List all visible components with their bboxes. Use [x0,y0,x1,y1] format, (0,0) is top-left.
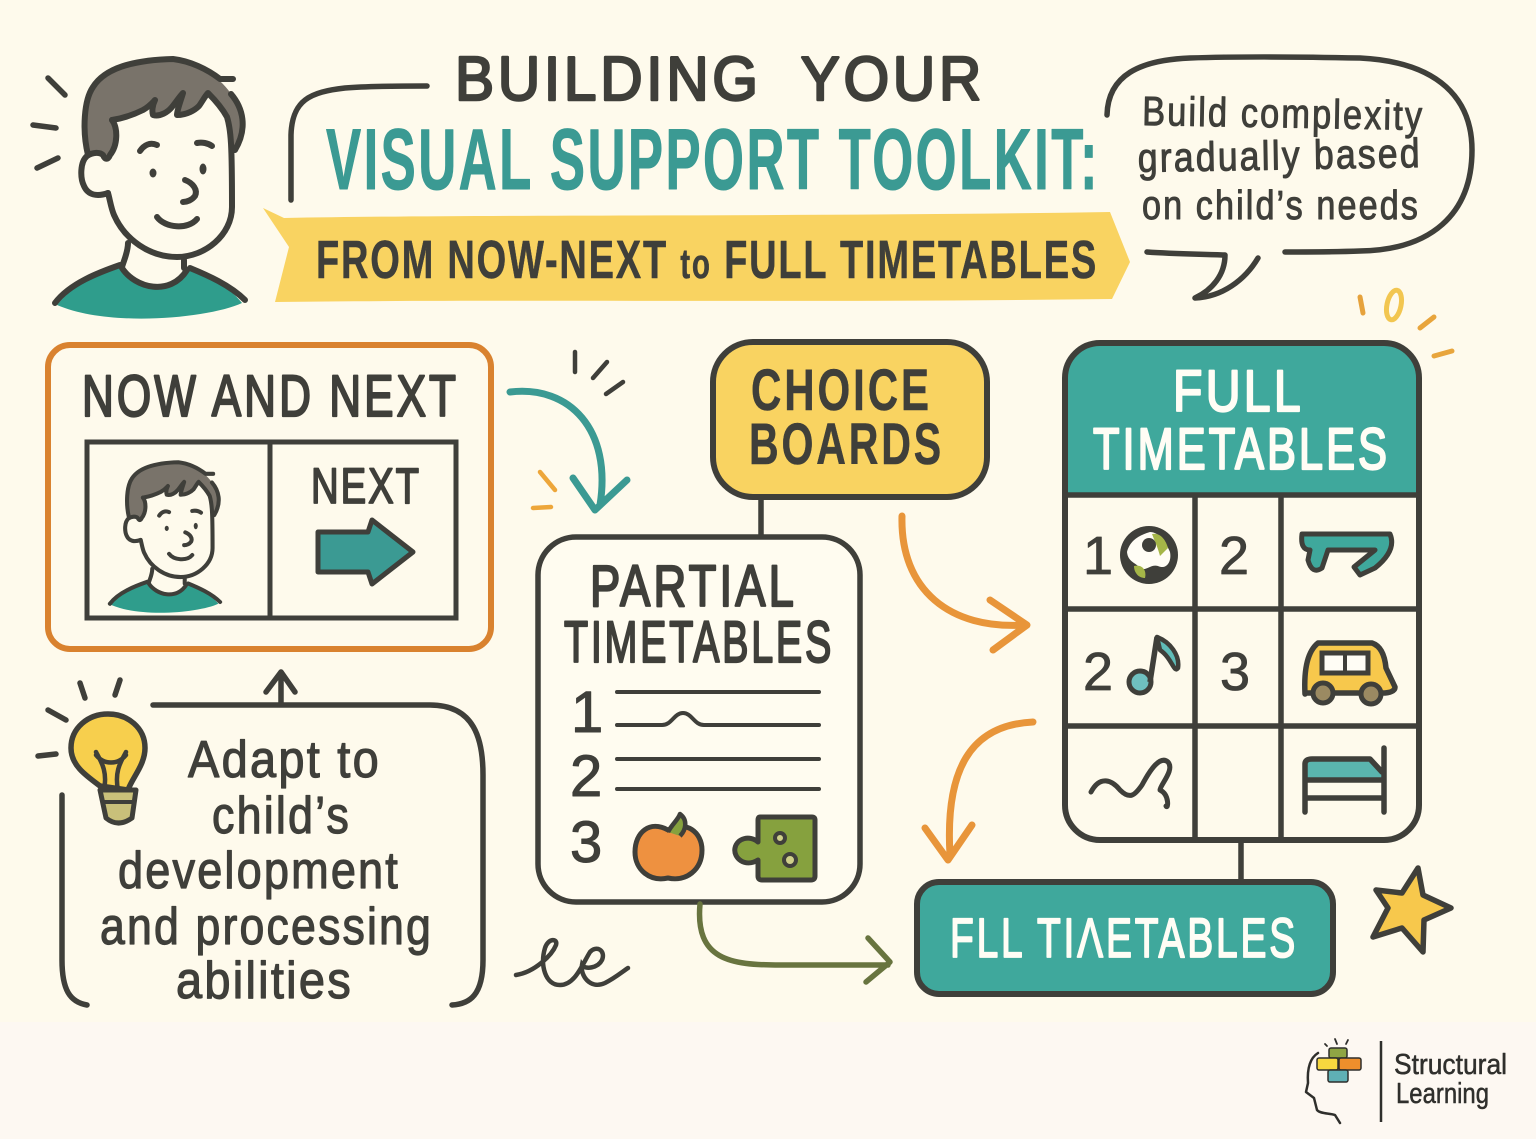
panel: full timetables: 1 [1083,526,1113,586]
icon: teal tool [1302,534,1392,575]
panel: fll timetables [917,882,1333,994]
callout: adapt to child's development: abilities [176,952,353,1010]
panel: choice boards: BOARDS [749,412,944,477]
icon: squiggle [1091,760,1170,807]
decorative sparks: full timetable [1360,289,1452,356]
panel: partial timetables: 1 [571,680,603,745]
banner: from now-next to full timetables [263,208,1130,302]
callout: adapt to child's development: child’s [212,787,351,845]
arrow: partial timetables to summary [700,904,890,982]
logo: structural learning [1306,1039,1507,1123]
now and next cards [87,442,456,618]
callout: adapt to child's development: and processing [100,898,433,956]
label: next: NEXT [311,458,421,514]
icon: apple [635,814,702,879]
logo: structural learning: Learning [1396,1078,1489,1110]
panel: partial timetables: 3 [570,810,602,875]
icon: music note [1129,637,1178,693]
speech bubble [1107,57,1472,298]
arrow: choice boards to full timetables [902,516,1027,650]
icon: star [1373,868,1451,952]
panel: now and next [48,345,491,649]
callout: adapt to child's development: development [118,842,400,900]
icon: puzzle piece [735,817,815,880]
icon: light bulb [38,680,145,823]
panel: full timetables: FULL [1173,359,1304,424]
speech bubble: Build complexity [1142,88,1425,139]
arrow: now and next to partial timetables [510,352,627,510]
logo: structural learning: Structural [1394,1049,1507,1081]
panel: partial timetables [538,537,860,902]
panel: fll timetables: FLL TIΛETABLES [950,906,1298,969]
panel: partial timetables: PARTIAL [590,554,797,619]
panel: partial timetables: 2 [570,744,602,809]
illustration: child portrait [33,59,245,319]
panel: choice boards [713,342,987,537]
heading: now and next: NOW AND NEXT [82,364,459,429]
icon: globe [1120,526,1178,584]
panel: full timetables: TIMETABLES [1093,417,1390,482]
icon: bus [1305,643,1395,704]
banner: from now-next to full timetables: FROM NOW-NEXT to FULL TIMETABLES [316,230,1098,290]
callout: adapt to child's development [62,672,483,1010]
speech bubble: on child’s needs [1142,182,1420,228]
icon: next arrow [318,520,413,584]
panel: full timetables [1065,343,1419,882]
doodle: loops [516,940,628,985]
panel: full timetables: 2 [1083,642,1113,702]
icon: bed [1305,748,1384,812]
heading: building your: BUILDING YOUR [455,45,985,114]
panel: full timetables: 3 [1220,642,1250,702]
panel: full timetables: 2 [1219,526,1249,586]
arrow: full timetables to summary [925,722,1033,860]
panel: partial timetables: TIMETABLES [564,610,834,675]
speech bubble: gradually based [1137,130,1422,181]
panel: choice boards: CHOICE [751,358,932,423]
callout: adapt to child's development: Adapt to [188,731,381,789]
title bracket [291,86,427,200]
